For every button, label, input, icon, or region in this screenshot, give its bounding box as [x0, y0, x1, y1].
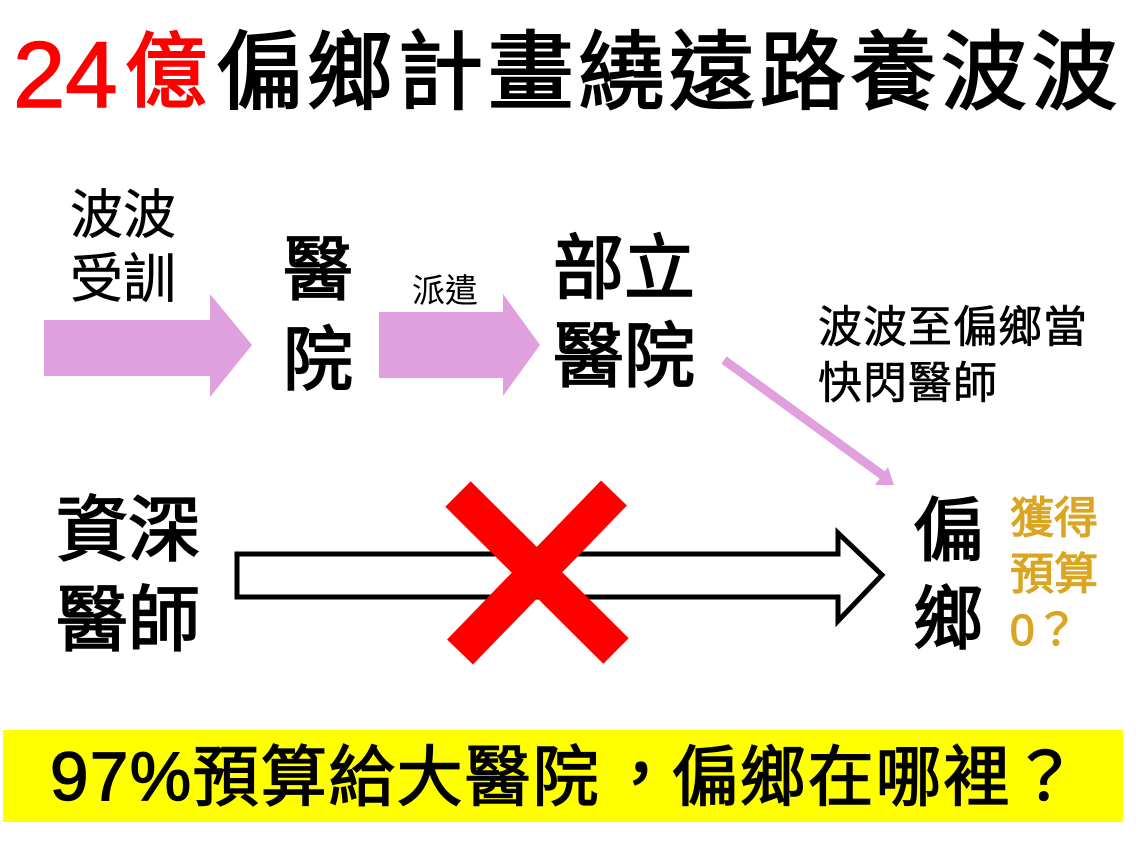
- label: 獲得預算0?: [1010, 494, 1098, 655]
- label: 醫院: [283, 231, 353, 399]
- label: 波波至偏鄉當快閃醫師: 快閃醫師: [818, 359, 998, 408]
- label: 資深醫師: [56, 491, 200, 661]
- title: 偏鄉計畫繞遠路養波波: [216, 25, 1122, 121]
- label: 波波受訓: [70, 186, 176, 309]
- label: 波波受訓: 受訓: [70, 250, 176, 309]
- label: 波波受訓: 波波: [70, 186, 176, 245]
- label: 醫院: 醫: [283, 231, 353, 309]
- label: 偏鄉: 偏: [913, 492, 983, 570]
- banner: [3, 730, 1123, 822]
- label: 波波至偏鄉當快閃醫師: 波波至偏鄉當: [818, 303, 1088, 352]
- label: 部立醫院: 部立: [553, 230, 695, 309]
- title: 億: [125, 27, 207, 118]
- label: 獲得預算0?: 0？: [1010, 606, 1078, 655]
- label: 偏鄉: [913, 492, 983, 658]
- label: 偏鄉: 鄉: [913, 580, 983, 658]
- label: 部立醫院: [553, 230, 695, 397]
- label: 部立醫院: 醫院: [553, 318, 695, 397]
- label: 派遣: 派遣: [412, 272, 478, 309]
- label: 資深醫師: 資深: [56, 491, 200, 571]
- label: 獲得預算0?: 獲得: [1010, 494, 1098, 543]
- label: 獲得預算0?: 預算: [1010, 550, 1098, 599]
- label: 波波至偏鄉當快閃醫師: [818, 303, 1088, 408]
- title: 24: [13, 22, 118, 127]
- label: 資深醫師: 醫師: [56, 581, 200, 661]
- banner text: 97%預算給大醫院，偏鄉在哪裡？: [50, 737, 1080, 815]
- label: 醫院: 院: [283, 321, 353, 399]
